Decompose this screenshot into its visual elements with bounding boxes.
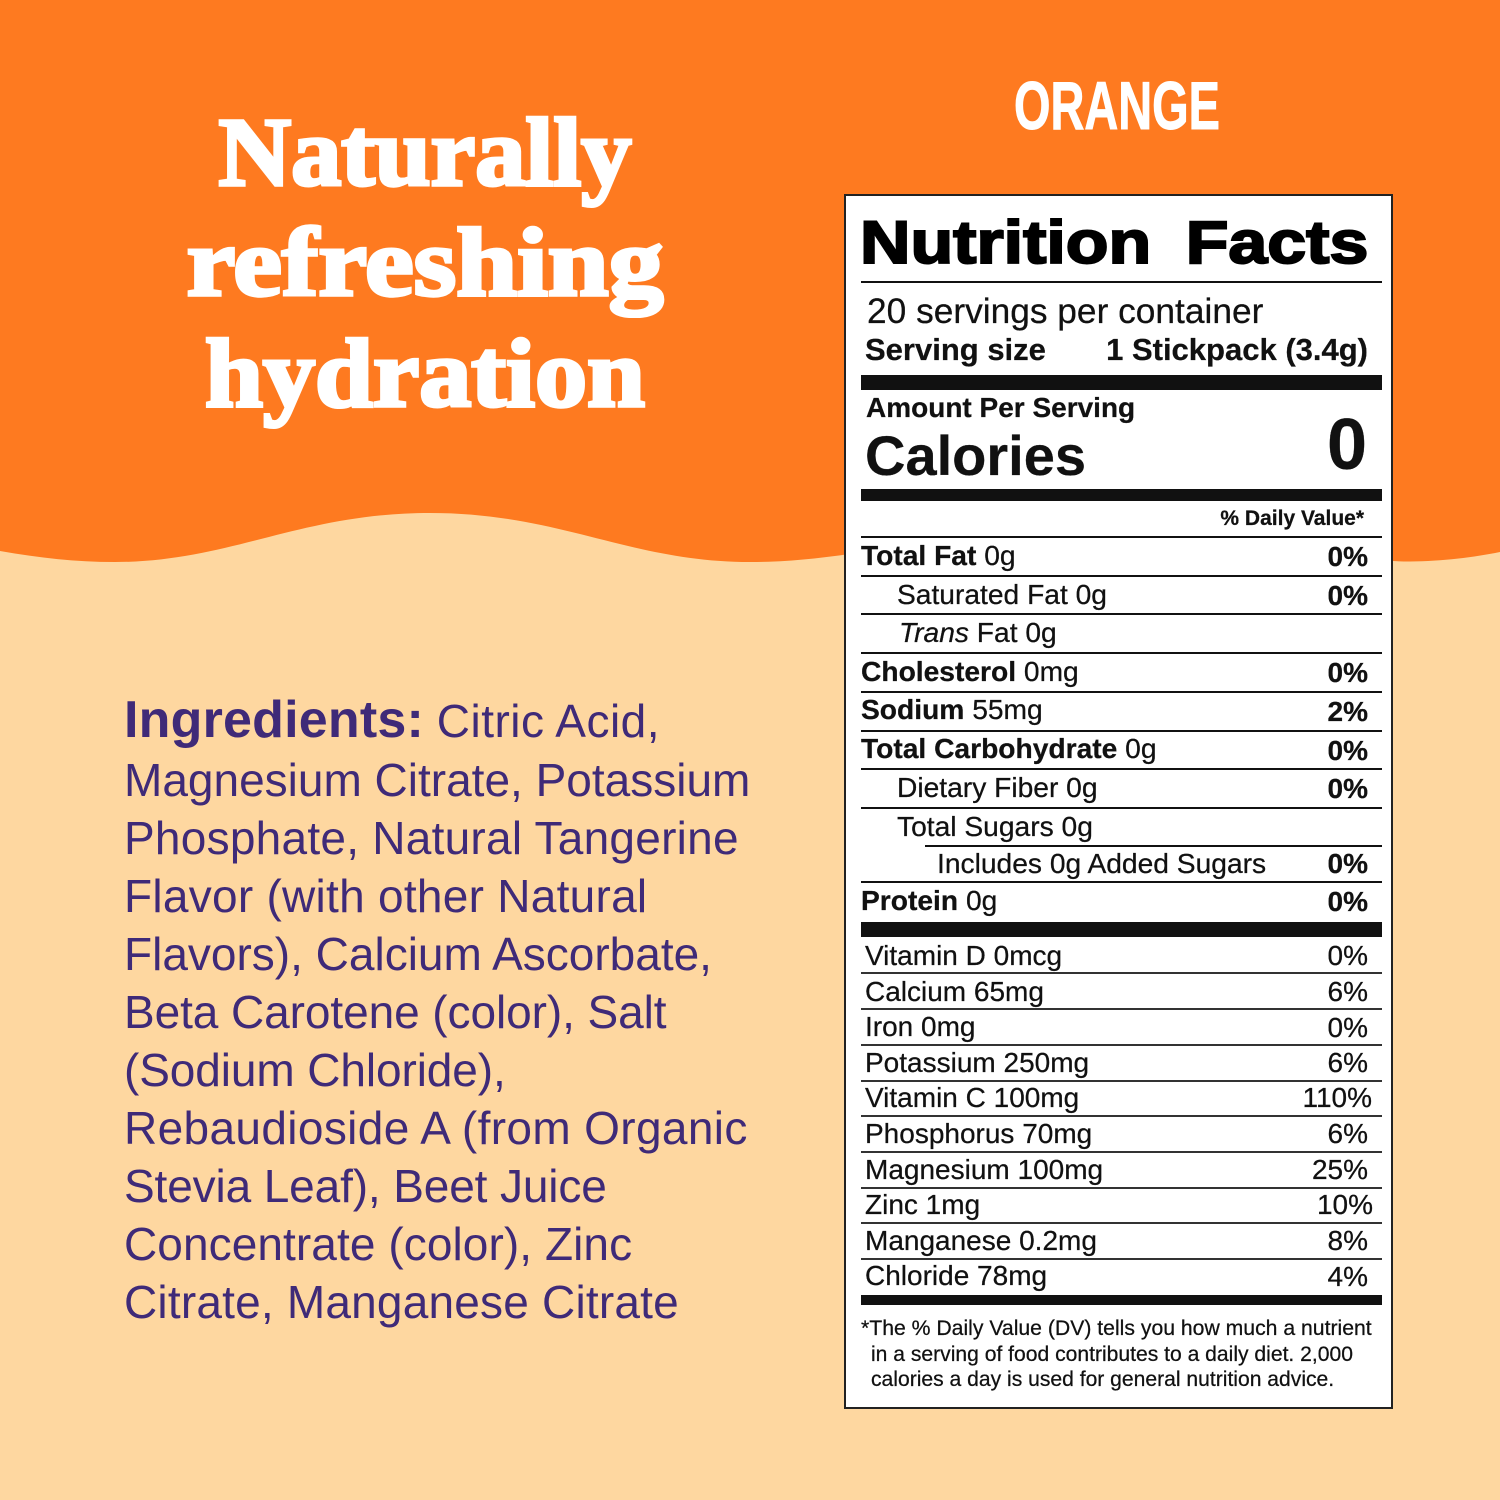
row: chloride: Chloride 78mg bbox=[865, 1260, 1047, 1291]
row: total carbohydrate: 0% bbox=[1328, 735, 1368, 766]
row: cholesterol bbox=[861, 655, 1368, 688]
row: phosphorus: Phosphorus 70mg bbox=[865, 1118, 1092, 1149]
row: vitamin D: Vitamin D 0mcg bbox=[865, 940, 1062, 971]
calories label: Calories bbox=[865, 424, 1086, 487]
row: manganese bbox=[865, 1225, 1368, 1256]
row: chloride bbox=[865, 1260, 1368, 1292]
row: cholesterol: 0% bbox=[1328, 657, 1368, 688]
row: vitamin C: Vitamin C 100mg bbox=[865, 1082, 1079, 1113]
row: total carbohydrate: Total Carbohydrate 0g bbox=[861, 732, 1157, 764]
main heading: hydration bbox=[205, 320, 645, 428]
row: added sugars: Includes 0g Added Sugars bbox=[937, 847, 1266, 879]
row: calcium: Calcium 65mg bbox=[865, 976, 1044, 1007]
row: calcium bbox=[865, 976, 1368, 1008]
row: total fat: 0% bbox=[1328, 541, 1368, 572]
ingredients text block: Phosphate, Natural Tangerine bbox=[124, 812, 739, 864]
servings per container: 20 servings per container bbox=[867, 292, 1263, 331]
row: zinc: Zinc 1mg bbox=[865, 1189, 980, 1220]
row: potassium: 6% bbox=[1328, 1047, 1368, 1078]
row: manganese: 8% bbox=[1328, 1225, 1368, 1256]
row: iron: Iron 0mg bbox=[865, 1011, 976, 1042]
ingredients text block: Flavors), Calcium Ascorbate, bbox=[124, 928, 712, 980]
row: magnesium: 25% bbox=[1312, 1154, 1368, 1185]
ingredients text block: Rebaudioside A (from Organic bbox=[124, 1102, 748, 1154]
main heading: Naturally bbox=[219, 99, 631, 207]
row: potassium: Potassium 250mg bbox=[865, 1047, 1089, 1078]
daily value header: % Daily Value* bbox=[1220, 507, 1364, 530]
row: saturated fat: Saturated Fat 0g bbox=[897, 578, 1107, 610]
row: magnesium: Magnesium 100mg bbox=[865, 1154, 1103, 1185]
row: trans fat: Trans Fat 0g bbox=[899, 616, 1057, 648]
ingredients text block: Citrate, Manganese Citrate bbox=[124, 1276, 679, 1328]
row: protein: Protein 0g bbox=[861, 884, 997, 916]
row: iron bbox=[865, 1011, 1368, 1043]
row: vitamin D bbox=[865, 940, 1368, 972]
row: added sugars: 0% bbox=[1328, 848, 1368, 879]
row: sodium: 2% bbox=[1328, 696, 1368, 727]
ingredients text block: Concentrate (color), Zinc bbox=[124, 1218, 632, 1270]
orange wavy header background bbox=[0, 0, 1500, 562]
row: sodium bbox=[861, 693, 1368, 727]
ingredients text block: Flavor (with other Natural bbox=[124, 870, 647, 922]
row: vitamin C bbox=[865, 1082, 1372, 1114]
row: sodium: Sodium 55mg bbox=[861, 693, 1043, 725]
row: cholesterol: Cholesterol 0mg bbox=[861, 655, 1079, 687]
row: potassium bbox=[865, 1047, 1368, 1078]
row: saturated fat bbox=[897, 578, 1368, 611]
row: total sugars: Total Sugars 0g bbox=[897, 810, 1093, 842]
row: protein bbox=[861, 884, 1368, 917]
footnote bbox=[861, 1317, 1372, 1391]
main heading bbox=[187, 99, 664, 429]
ingredients text block: Stevia Leaf), Beet Juice bbox=[124, 1160, 607, 1212]
ingredients text block: Beta Carotene (color), Salt bbox=[124, 986, 666, 1038]
row: total carbohydrate bbox=[861, 732, 1368, 766]
amount per serving: Amount Per Serving bbox=[866, 392, 1135, 423]
serving size bbox=[865, 332, 1368, 367]
row: total fat: Total Fat 0g bbox=[861, 539, 1016, 571]
row: magnesium bbox=[865, 1154, 1368, 1186]
row: dietary fiber bbox=[897, 771, 1368, 804]
footnote: *The % Daily Value (DV) tells you how much a nutrient bbox=[861, 1317, 1372, 1340]
calories value: 0 bbox=[1327, 405, 1367, 485]
serving size: 1 Stickpack (3.4g) bbox=[1106, 332, 1368, 367]
row: calcium: 6% bbox=[1328, 976, 1368, 1007]
footnote: calories a day is used for general nutrition advice. bbox=[871, 1368, 1334, 1391]
ingredients text block: Ingredients: Citric Acid, bbox=[124, 691, 660, 749]
nutrition facts title: Nutrition Facts bbox=[860, 209, 1368, 276]
row: chloride: 4% bbox=[1328, 1261, 1368, 1292]
footnote: in a serving of food contributes to a daily diet. 2,000 bbox=[871, 1343, 1353, 1366]
nutrition facts panel bbox=[844, 194, 1393, 1409]
row: phosphorus: 6% bbox=[1328, 1118, 1368, 1149]
ingredients text block bbox=[124, 691, 750, 1328]
row: zinc bbox=[865, 1189, 1373, 1220]
row: total fat bbox=[861, 539, 1368, 572]
row: dietary fiber: 0% bbox=[1328, 773, 1368, 804]
row: zinc: 10% bbox=[1317, 1189, 1373, 1220]
row: phosphorus bbox=[865, 1118, 1368, 1150]
flavor title: ORANGE bbox=[1014, 68, 1220, 144]
ingredients text block: (Sodium Chloride), bbox=[124, 1044, 506, 1096]
row: saturated fat: 0% bbox=[1328, 580, 1368, 611]
main heading: refreshing bbox=[187, 209, 663, 317]
ingredients text block: Magnesium Citrate, Potassium bbox=[124, 754, 750, 806]
row: manganese: Manganese 0.2mg bbox=[865, 1225, 1097, 1256]
serving size: Serving size bbox=[865, 332, 1046, 367]
row: vitamin C: 110% bbox=[1302, 1082, 1372, 1113]
row: dietary fiber: Dietary Fiber 0g bbox=[897, 771, 1098, 803]
row: iron: 0% bbox=[1328, 1012, 1368, 1043]
row: protein: 0% bbox=[1328, 886, 1368, 917]
row: vitamin D: 0% bbox=[1328, 940, 1368, 971]
